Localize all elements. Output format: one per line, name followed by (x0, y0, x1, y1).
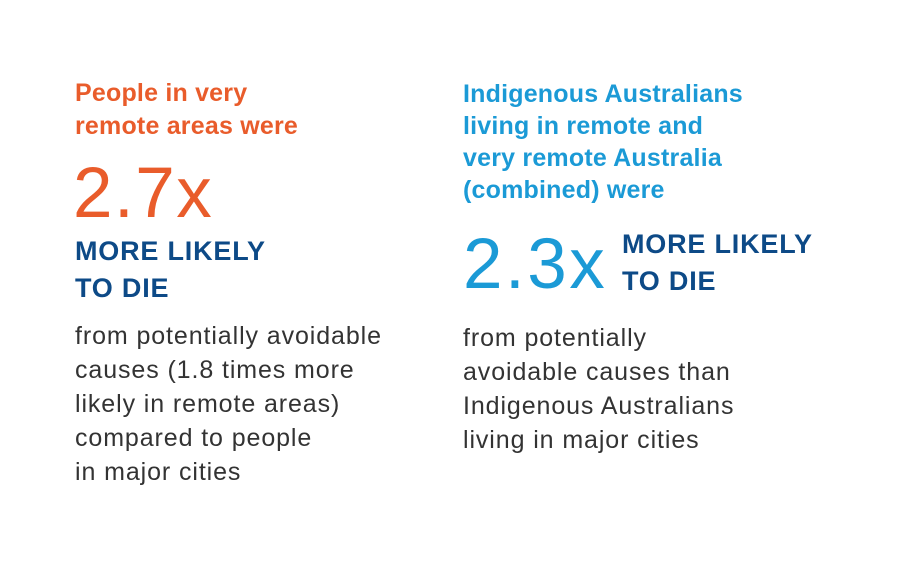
heading: people in very remote areas (75, 79, 298, 140)
panel: remote areas (73, 79, 382, 486)
stat: 2.7x: 2.7x (73, 154, 213, 233)
heading: people in very remote areas: People in very (75, 79, 247, 107)
text block: left description: compared to people (75, 424, 312, 452)
stat: 2.3x: 2.3x (463, 225, 607, 304)
heading: indigenous australians: (combined) were (463, 176, 665, 204)
text block: left description: from potentially avoidable (75, 322, 382, 350)
heading: indigenous australians: Indigenous Australians (463, 80, 743, 108)
text block: left description: causes (1.8 times more (75, 356, 355, 384)
heading: people in very remote areas: remote areas were (75, 112, 298, 140)
label: more likely to die: TO DIE (622, 266, 716, 296)
text block: left description: likely in remote areas) (75, 390, 340, 418)
label: more likely to die: MORE LIKELY (75, 236, 266, 266)
text block: left description: in major cities (75, 458, 241, 486)
label: more likely to die (622, 229, 813, 296)
text block: right description: from potentially (463, 324, 647, 352)
label: more likely to die: MORE LIKELY (622, 229, 813, 259)
panel: indigenous australians (463, 80, 813, 454)
text block: right description: living in major cities (463, 426, 700, 454)
text block: right description: avoidable causes than (463, 358, 731, 386)
heading: indigenous australians (463, 80, 743, 204)
text block: right description (463, 324, 734, 454)
heading: indigenous australians: very remote Australia (463, 144, 722, 172)
text block: left description (75, 322, 382, 486)
text block: right description: Indigenous Australians (463, 392, 734, 420)
label: more likely to die (75, 236, 266, 303)
label: more likely to die: TO DIE (75, 273, 169, 303)
heading: indigenous australians: living in remote and (463, 112, 703, 140)
